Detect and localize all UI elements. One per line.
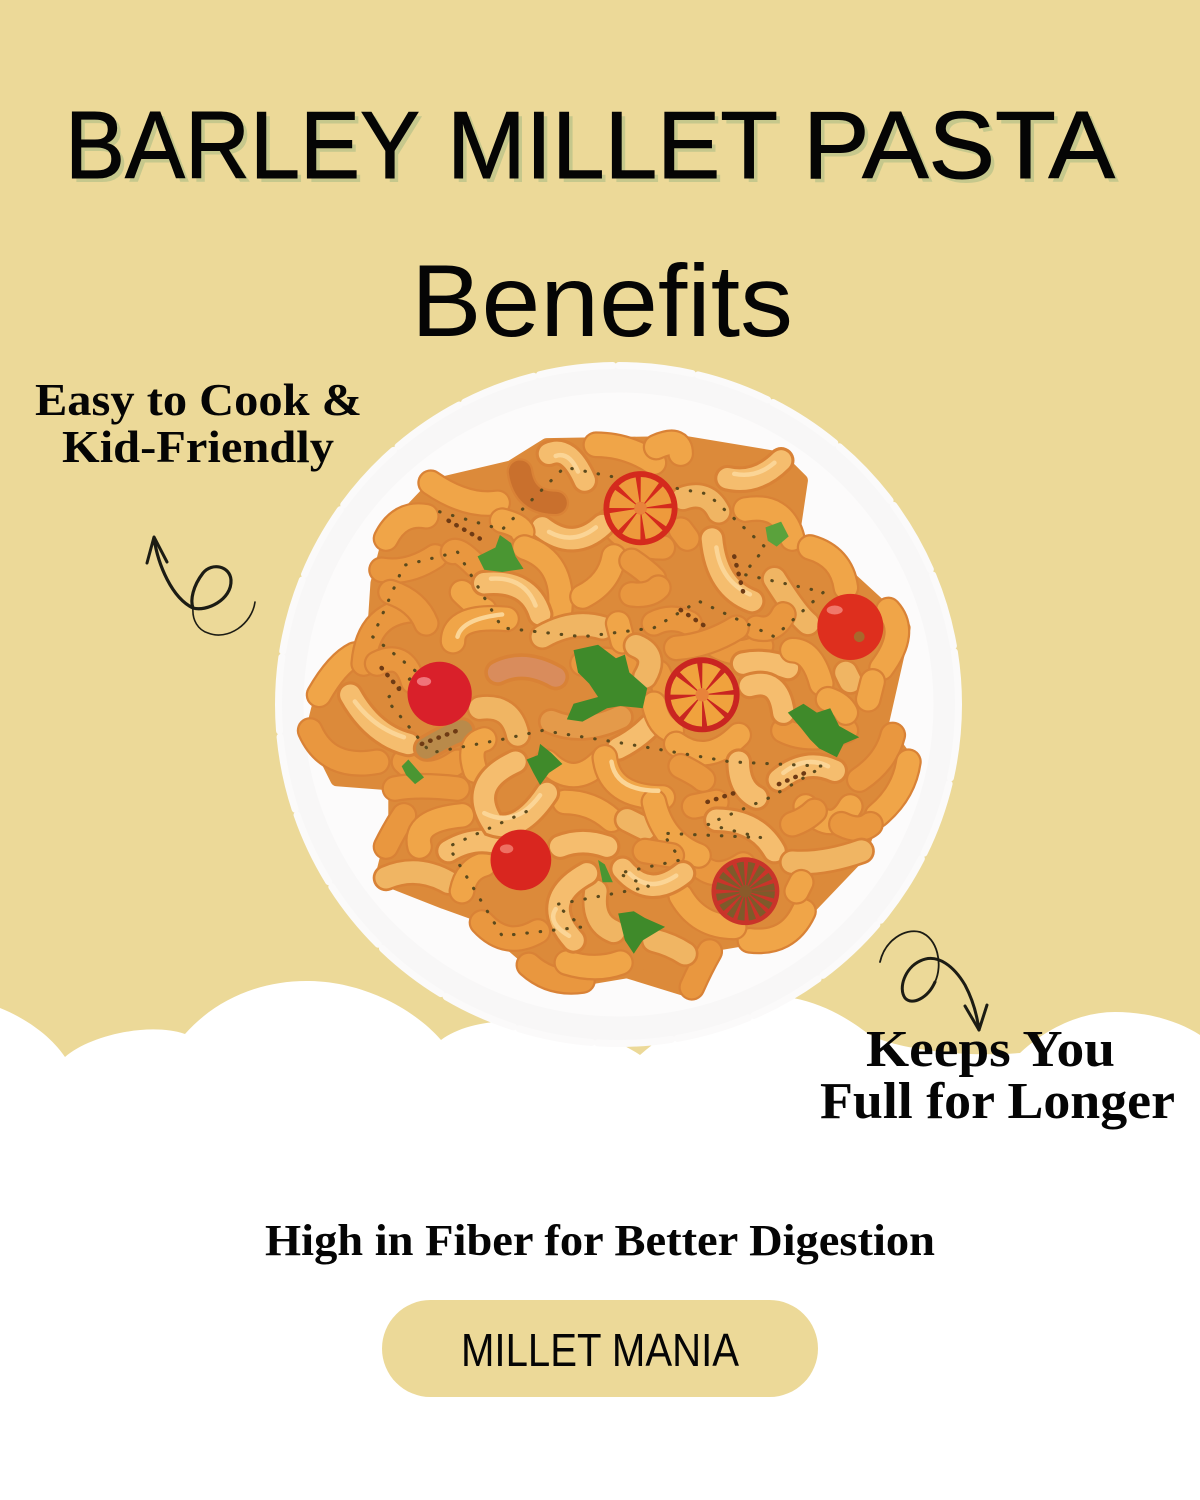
benefit: easy to cook	[35, 374, 362, 472]
benefit: easy to cook: Kid-Friendly	[62, 421, 334, 472]
title: MILLET	[447, 92, 778, 199]
benefit: keeps you full: Keeps You	[866, 1021, 1115, 1078]
benefit: keeps you full	[820, 1021, 1175, 1130]
title: MILLET	[451, 96, 782, 203]
arrow: points up to easy to cook	[147, 537, 255, 635]
seasoning specks	[373, 467, 824, 936]
brand pill	[382, 1300, 818, 1397]
plate	[278, 366, 958, 1044]
title: BARLEY	[69, 96, 424, 203]
heading: benefits: Benefits	[411, 244, 793, 358]
pasta pile	[310, 443, 908, 989]
whole tomatoes	[407, 594, 883, 890]
herbs	[402, 522, 859, 954]
arrow: points down to keeps you full	[880, 931, 987, 1030]
benefit: keeps you full: Full for Longer	[820, 1073, 1175, 1130]
title: BARLEY	[65, 92, 420, 199]
white cloud footer panel	[0, 981, 1200, 1500]
title: PASTA	[803, 92, 1115, 199]
plate of pasta	[278, 366, 958, 1044]
benefit: easy to cook: Easy to Cook &	[35, 374, 362, 425]
brand pill: MILLET MANIA	[461, 1324, 739, 1376]
title: PASTA	[807, 96, 1119, 203]
benefit: high in fiber: High in Fiber for Better Digestion	[265, 1216, 935, 1265]
cut tomatoes	[603, 471, 779, 925]
title	[65, 92, 1119, 203]
